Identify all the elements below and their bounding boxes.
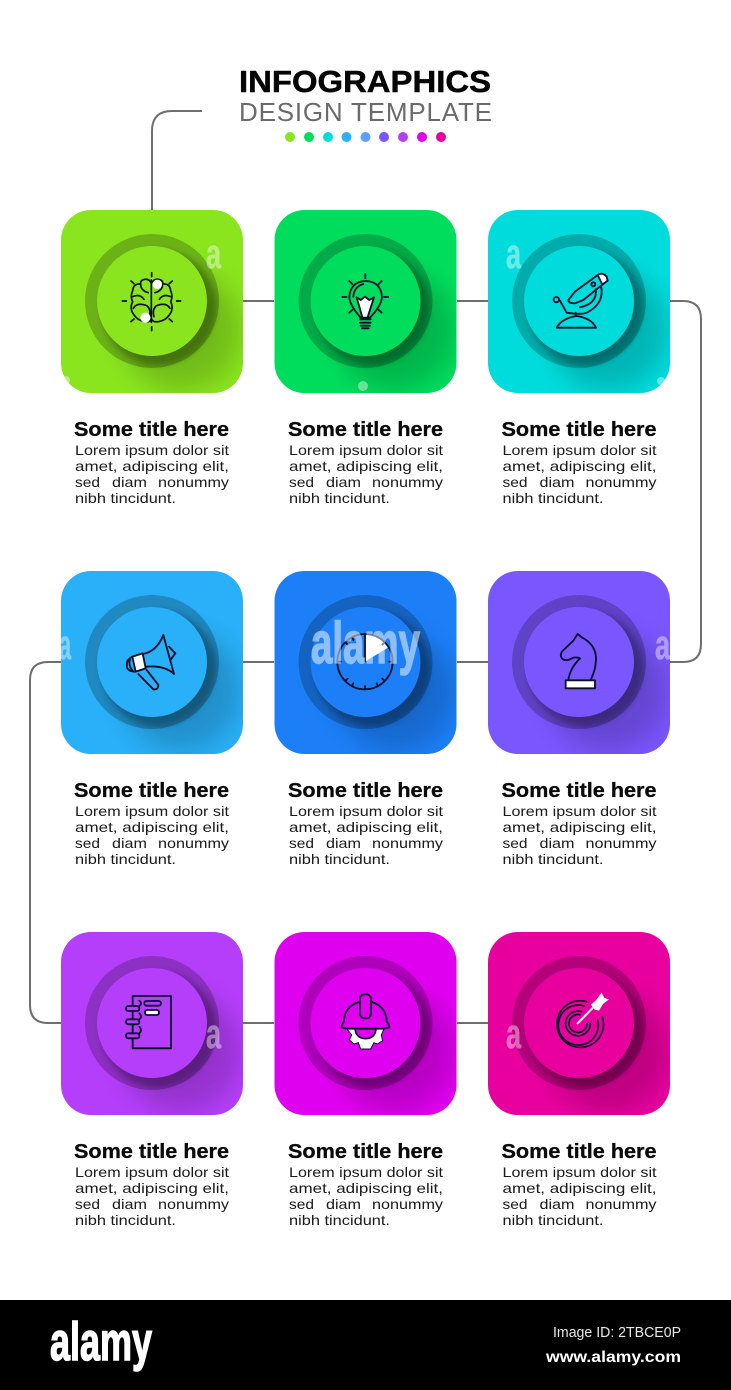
text: card 8: amet, adipiscing elit, xyxy=(289,1180,443,1196)
text: card 7: nibh tincidunt. xyxy=(75,1212,176,1228)
text: card 8: diam xyxy=(326,1196,361,1212)
text: card 7: Lorem ipsum dolor sit xyxy=(75,1164,229,1180)
text: card 3: diam xyxy=(540,474,574,490)
text: card 7: diam xyxy=(112,1196,147,1212)
text: card 1: Some title here xyxy=(74,418,229,441)
panel: card 1 green xyxy=(61,210,243,393)
icon: light bulb xyxy=(342,274,388,328)
watermark fragments xyxy=(59,230,670,1057)
panel: card 2 green xyxy=(274,210,456,393)
text: card 3: Some title here xyxy=(502,418,656,441)
text: card 7 xyxy=(74,1140,229,1228)
text: card 5: nonummy xyxy=(372,835,443,851)
text: card 6: Lorem ipsum dolor sit xyxy=(502,803,657,819)
text: card 7: Some title here xyxy=(74,1140,229,1163)
panel: card 5 blue xyxy=(274,571,456,754)
text: card 4: amet, adipiscing elit, xyxy=(75,819,229,835)
icon: notebook xyxy=(126,996,171,1048)
text: card 6: sed xyxy=(502,835,528,851)
icon: microscope xyxy=(554,274,608,328)
text: card 2: Lorem ipsum dolor sit xyxy=(289,442,443,458)
text: card 3 xyxy=(502,418,657,506)
text: card 3: amet, adipiscing elit, xyxy=(502,458,656,474)
icon: chess knight xyxy=(561,634,596,688)
icon: helmet with gear xyxy=(342,994,389,1049)
text: card 6: nonummy xyxy=(586,835,656,851)
text: card 1: sed xyxy=(75,474,100,490)
panel: card 9 pink xyxy=(488,932,670,1115)
panel: card 8 magenta xyxy=(274,932,456,1115)
panel: card 7 purple xyxy=(61,932,243,1115)
text: card 4: diam xyxy=(112,835,147,851)
text: card 1: nibh tincidunt. xyxy=(75,490,176,506)
text: card 4 xyxy=(74,779,229,867)
text: card 5 xyxy=(288,779,443,867)
text: card 2: Some title here xyxy=(288,418,443,441)
footer bar xyxy=(0,1300,731,1390)
text: card 1: Lorem ipsum dolor sit xyxy=(75,442,229,458)
footer logo: alamy xyxy=(50,1312,152,1372)
text: card 4: sed xyxy=(75,835,100,851)
text: card 8: Lorem ipsum dolor sit xyxy=(289,1164,443,1180)
text: card 9: Some title here xyxy=(502,1140,656,1163)
text: card 2: nibh tincidunt. xyxy=(289,490,390,506)
panel: card 3 cyan xyxy=(488,210,670,393)
text: card 4: nibh tincidunt. xyxy=(75,851,176,867)
watermark fragments: a xyxy=(655,621,670,668)
text: card 5: nibh tincidunt. xyxy=(289,851,390,867)
text: card 4: nonummy xyxy=(158,835,229,851)
text: card 1: nonummy xyxy=(158,474,229,490)
text: card 4: Some title here xyxy=(74,779,229,802)
image id: Image ID: 2TBCE0P xyxy=(553,1324,681,1341)
watermark fragments: a xyxy=(206,1010,221,1057)
text: card 8 xyxy=(288,1140,443,1228)
text: card 4: Lorem ipsum dolor sit xyxy=(75,803,229,819)
text: card 3: nibh tincidunt. xyxy=(502,490,604,506)
text: card 1: amet, adipiscing elit, xyxy=(75,458,229,474)
text: card 7: sed xyxy=(75,1196,100,1212)
watermark fragments: a xyxy=(59,621,71,668)
text: card 1: diam xyxy=(112,474,147,490)
text: card 2: sed xyxy=(289,474,314,490)
text: card 8: nonummy xyxy=(372,1196,443,1212)
connector line xyxy=(30,111,701,1023)
text: card 9: nonummy xyxy=(586,1196,656,1212)
text: card 3: Lorem ipsum dolor sit xyxy=(502,442,657,458)
text: card 6: nibh tincidunt. xyxy=(502,851,604,867)
text: card 9: Lorem ipsum dolor sit xyxy=(502,1164,657,1180)
text: card 8: sed xyxy=(289,1196,314,1212)
text: card 9: amet, adipiscing elit, xyxy=(502,1180,656,1196)
text: card 5: Lorem ipsum dolor sit xyxy=(289,803,443,819)
panel: card 4 sky blue xyxy=(61,571,243,754)
text: card 2: amet, adipiscing elit, xyxy=(289,458,443,474)
watermark: alamy: alamy xyxy=(311,611,420,676)
title: INFOGRAPHICS xyxy=(239,64,491,99)
watermark fragments: a xyxy=(506,1010,521,1057)
icon: megaphone xyxy=(127,635,175,689)
text: card 2: nonummy xyxy=(372,474,443,490)
icon: timer xyxy=(337,634,393,689)
watermark fragments: a xyxy=(506,230,521,277)
text: card 8: Some title here xyxy=(288,1140,443,1163)
title xyxy=(239,64,492,127)
text: card 9: nibh tincidunt. xyxy=(502,1212,604,1228)
panel: card 6 violet xyxy=(488,571,670,754)
text: card 6: diam xyxy=(540,835,574,851)
text: card 1 xyxy=(74,418,229,506)
text: card 6 xyxy=(502,779,657,867)
text: card 8: nibh tincidunt. xyxy=(289,1212,390,1228)
text: card 9 xyxy=(502,1140,657,1228)
title: DESIGN TEMPLATE xyxy=(239,97,492,127)
website: www.alamy.com xyxy=(545,1349,681,1366)
text: card 5: sed xyxy=(289,835,314,851)
text: card 5: Some title here xyxy=(288,779,443,802)
text: card 7: amet, adipiscing elit, xyxy=(75,1180,229,1196)
text: card 9: sed xyxy=(502,1196,528,1212)
text: card 2 xyxy=(288,418,443,506)
text: card 6: amet, adipiscing elit, xyxy=(502,819,656,835)
icon: target with arrow xyxy=(557,993,609,1047)
colour dots xyxy=(285,132,446,142)
text: card 7: nonummy xyxy=(158,1196,229,1212)
icon: brain xyxy=(122,273,181,331)
text: card 2: diam xyxy=(326,474,361,490)
text: card 6: Some title here xyxy=(502,779,656,802)
text: card 3: nonummy xyxy=(586,474,656,490)
text: card 5: diam xyxy=(326,835,361,851)
text: card 9: diam xyxy=(540,1196,574,1212)
text: card 5: amet, adipiscing elit, xyxy=(289,819,443,835)
watermark fragments: a xyxy=(206,230,221,277)
text: card 3: sed xyxy=(502,474,528,490)
